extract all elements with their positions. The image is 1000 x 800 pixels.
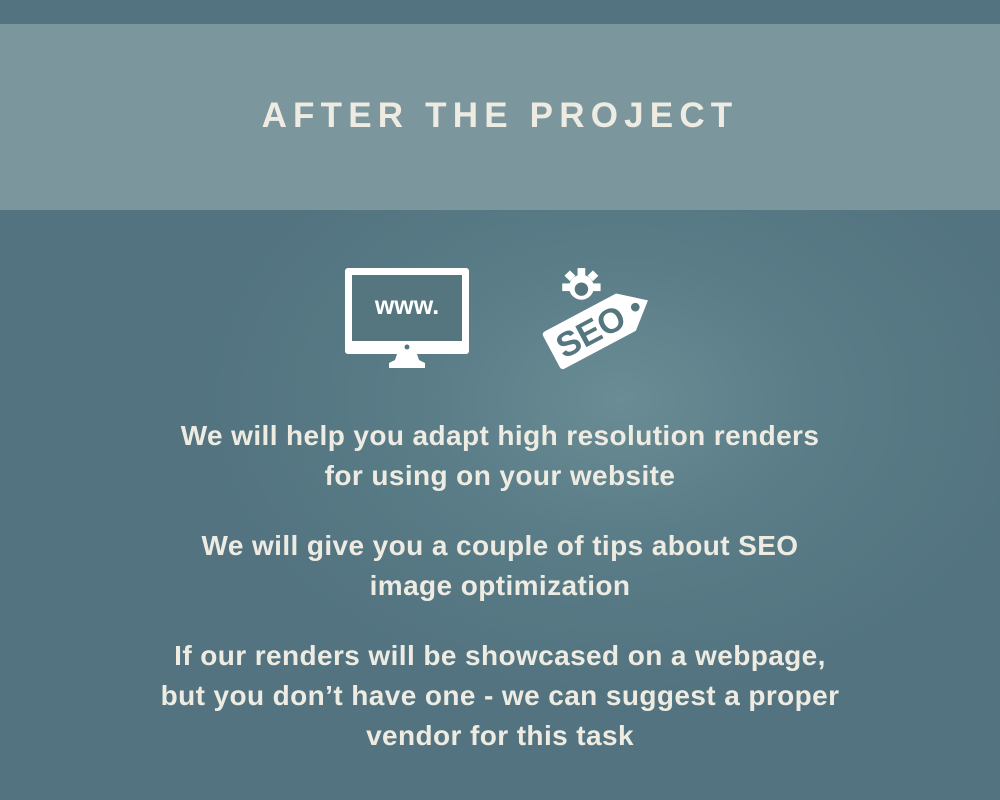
text block 2: image optimization [370, 570, 630, 601]
text block 2: We will give you a couple of tips about SEO [202, 530, 798, 561]
text block 1: We will help you adapt high resolution renders [181, 420, 819, 451]
text block 2 [202, 530, 798, 601]
icon: SEO tag [542, 268, 648, 370]
text block 3 [161, 640, 839, 751]
icon: monitor www [345, 268, 469, 368]
text block 1 [180, 420, 819, 491]
text block 3: vendor for this task [366, 720, 634, 751]
header band [0, 24, 1000, 210]
icon: SEO tag: SEO [550, 298, 632, 366]
title: AFTER THE PROJECT [262, 96, 738, 135]
text block 3: If our renders will be showcased on a webpage, [174, 640, 826, 671]
text block 3: but you don’t have one - we can suggest a proper [161, 680, 839, 711]
icon: monitor www: www. [374, 292, 439, 320]
text block 1: for using on your website [325, 460, 675, 491]
